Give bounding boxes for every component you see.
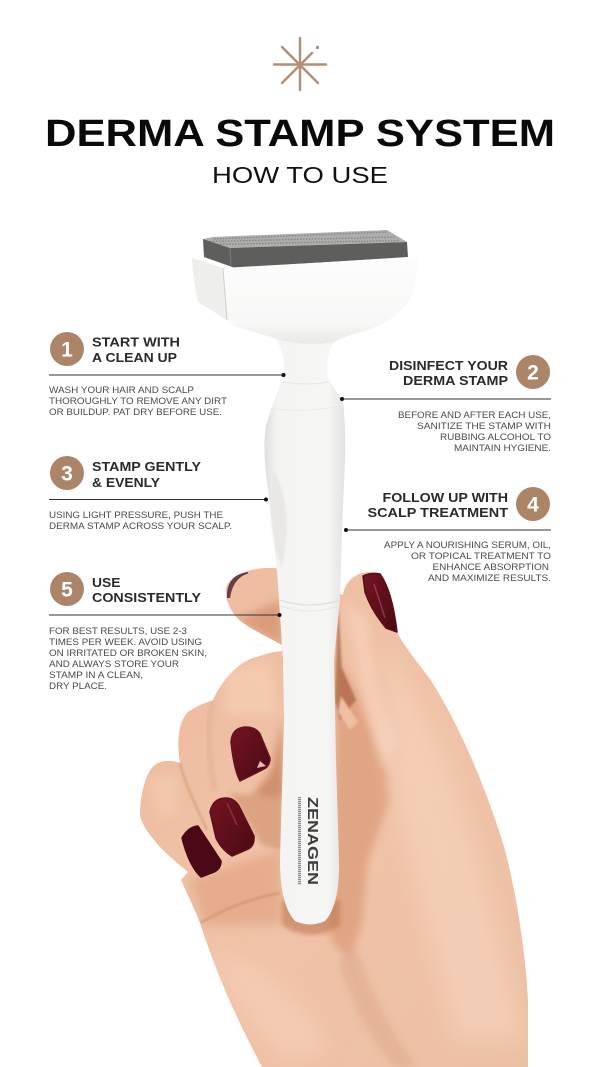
step 3: stamp gently and evenly	[49, 456, 268, 531]
step 5: use consistently: 5	[61, 578, 73, 602]
step 1: start with a clean up: START WITH	[92, 336, 180, 350]
index fingernail edge	[227, 572, 248, 598]
step 5: use consistently: STAMP IN A CLEAN,	[49, 670, 143, 680]
step 3: stamp gently and evenly: STAMP GENTLY	[92, 460, 202, 474]
step 4: follow up with scalp treatment: SCALP TREATMENT	[368, 506, 508, 520]
step 5: use consistently: CONSISTENTLY	[92, 591, 202, 605]
step 2: disinfect your derma stamp: DERMA STAMP	[403, 374, 508, 388]
step 2: disinfect your derma stamp: DISINFECT YOUR	[389, 359, 508, 373]
step 4: follow up with scalp treatment	[344, 487, 551, 583]
step 1: start with a clean up: OR BUILDUP. PAT DRY BEFORE USE.	[49, 407, 222, 417]
middle fingernail	[231, 727, 270, 781]
thumbnail	[363, 573, 397, 632]
step 4: follow up with scalp treatment: ENHANCE ABSORPTION	[432, 562, 549, 572]
step 5: use consistently: FOR BEST RESULTS, USE 2-3	[49, 626, 187, 636]
step 3: stamp gently and evenly: USING LIGHT PRESSURE, PUSH THE	[49, 510, 223, 520]
step 2: disinfect your derma stamp: RUBBING ALCOHOL TO	[440, 432, 551, 442]
step 4: follow up with scalp treatment: APPLY A NOURISHING SERUM, OIL,	[384, 540, 551, 550]
step 2: disinfect your derma stamp: SANITIZE THE STAMP WITH	[417, 421, 551, 431]
stamp head side	[192, 258, 227, 320]
ring fingernail	[210, 798, 254, 856]
step 4: follow up with scalp treatment: OR TOPICAL TREATMENT TO	[411, 551, 551, 561]
step 1: start with a clean up	[49, 332, 286, 417]
icon: starburst logo	[274, 38, 326, 90]
palm shading beside handle	[330, 660, 390, 960]
step 2: disinfect your derma stamp: 2	[527, 362, 539, 384]
step 2: disinfect your derma stamp	[340, 355, 551, 453]
step 5: use consistently: ON IRRITATED OR BROKEN SKIN,	[49, 648, 207, 658]
stamp head	[223, 257, 417, 344]
step 4: follow up with scalp treatment: AND MAXIMIZE RESULTS.	[428, 573, 551, 583]
step 5: use consistently: AND ALWAYS STORE YOUR	[49, 659, 179, 669]
handle body	[264, 336, 345, 924]
metal plate front face	[203, 239, 408, 268]
hand holding the stamp	[140, 568, 528, 1067]
step 2: disinfect your derma stamp: BEFORE AND AFTER EACH USE,	[398, 410, 551, 420]
step 2: disinfect your derma stamp: MAINTAIN HYGIENE.	[454, 443, 551, 453]
step 1: start with a clean up: 1	[61, 338, 73, 362]
brand name: ZENAGEN	[304, 797, 321, 885]
step 5: use consistently: DRY PLACE.	[49, 681, 107, 691]
step 4: follow up with scalp treatment: FOLLOW UP WITH	[382, 491, 508, 505]
pinky fingernail	[182, 826, 221, 877]
step 4: follow up with scalp treatment: 4	[527, 494, 539, 516]
subtitle: HOW TO USE	[212, 162, 388, 188]
step 1: start with a clean up: A CLEAN UP	[92, 351, 177, 365]
step 3: stamp gently and evenly: 3	[61, 462, 73, 486]
finger shadows	[236, 600, 282, 645]
step 3: stamp gently and evenly: DERMA STAMP ACROSS YOUR SCALP.	[49, 521, 232, 531]
metal needle plate top	[203, 230, 407, 248]
step 5: use consistently: TIMES PER WEEK. AVOID USING	[49, 637, 202, 647]
step 1: start with a clean up: WASH YOUR HAIR AND SCALP	[49, 385, 194, 395]
step 5: use consistently: USE	[92, 576, 120, 590]
step 5: use consistently	[49, 572, 282, 691]
derma stamp tool	[192, 230, 417, 924]
title: DERMA STAMP SYSTEM	[45, 112, 555, 155]
skin highlights	[387, 673, 518, 1038]
step 1: start with a clean up: THOROUGHLY TO REMOVE ANY DIRT	[49, 396, 227, 406]
step 3: stamp gently and evenly: & EVENLY	[92, 476, 161, 490]
